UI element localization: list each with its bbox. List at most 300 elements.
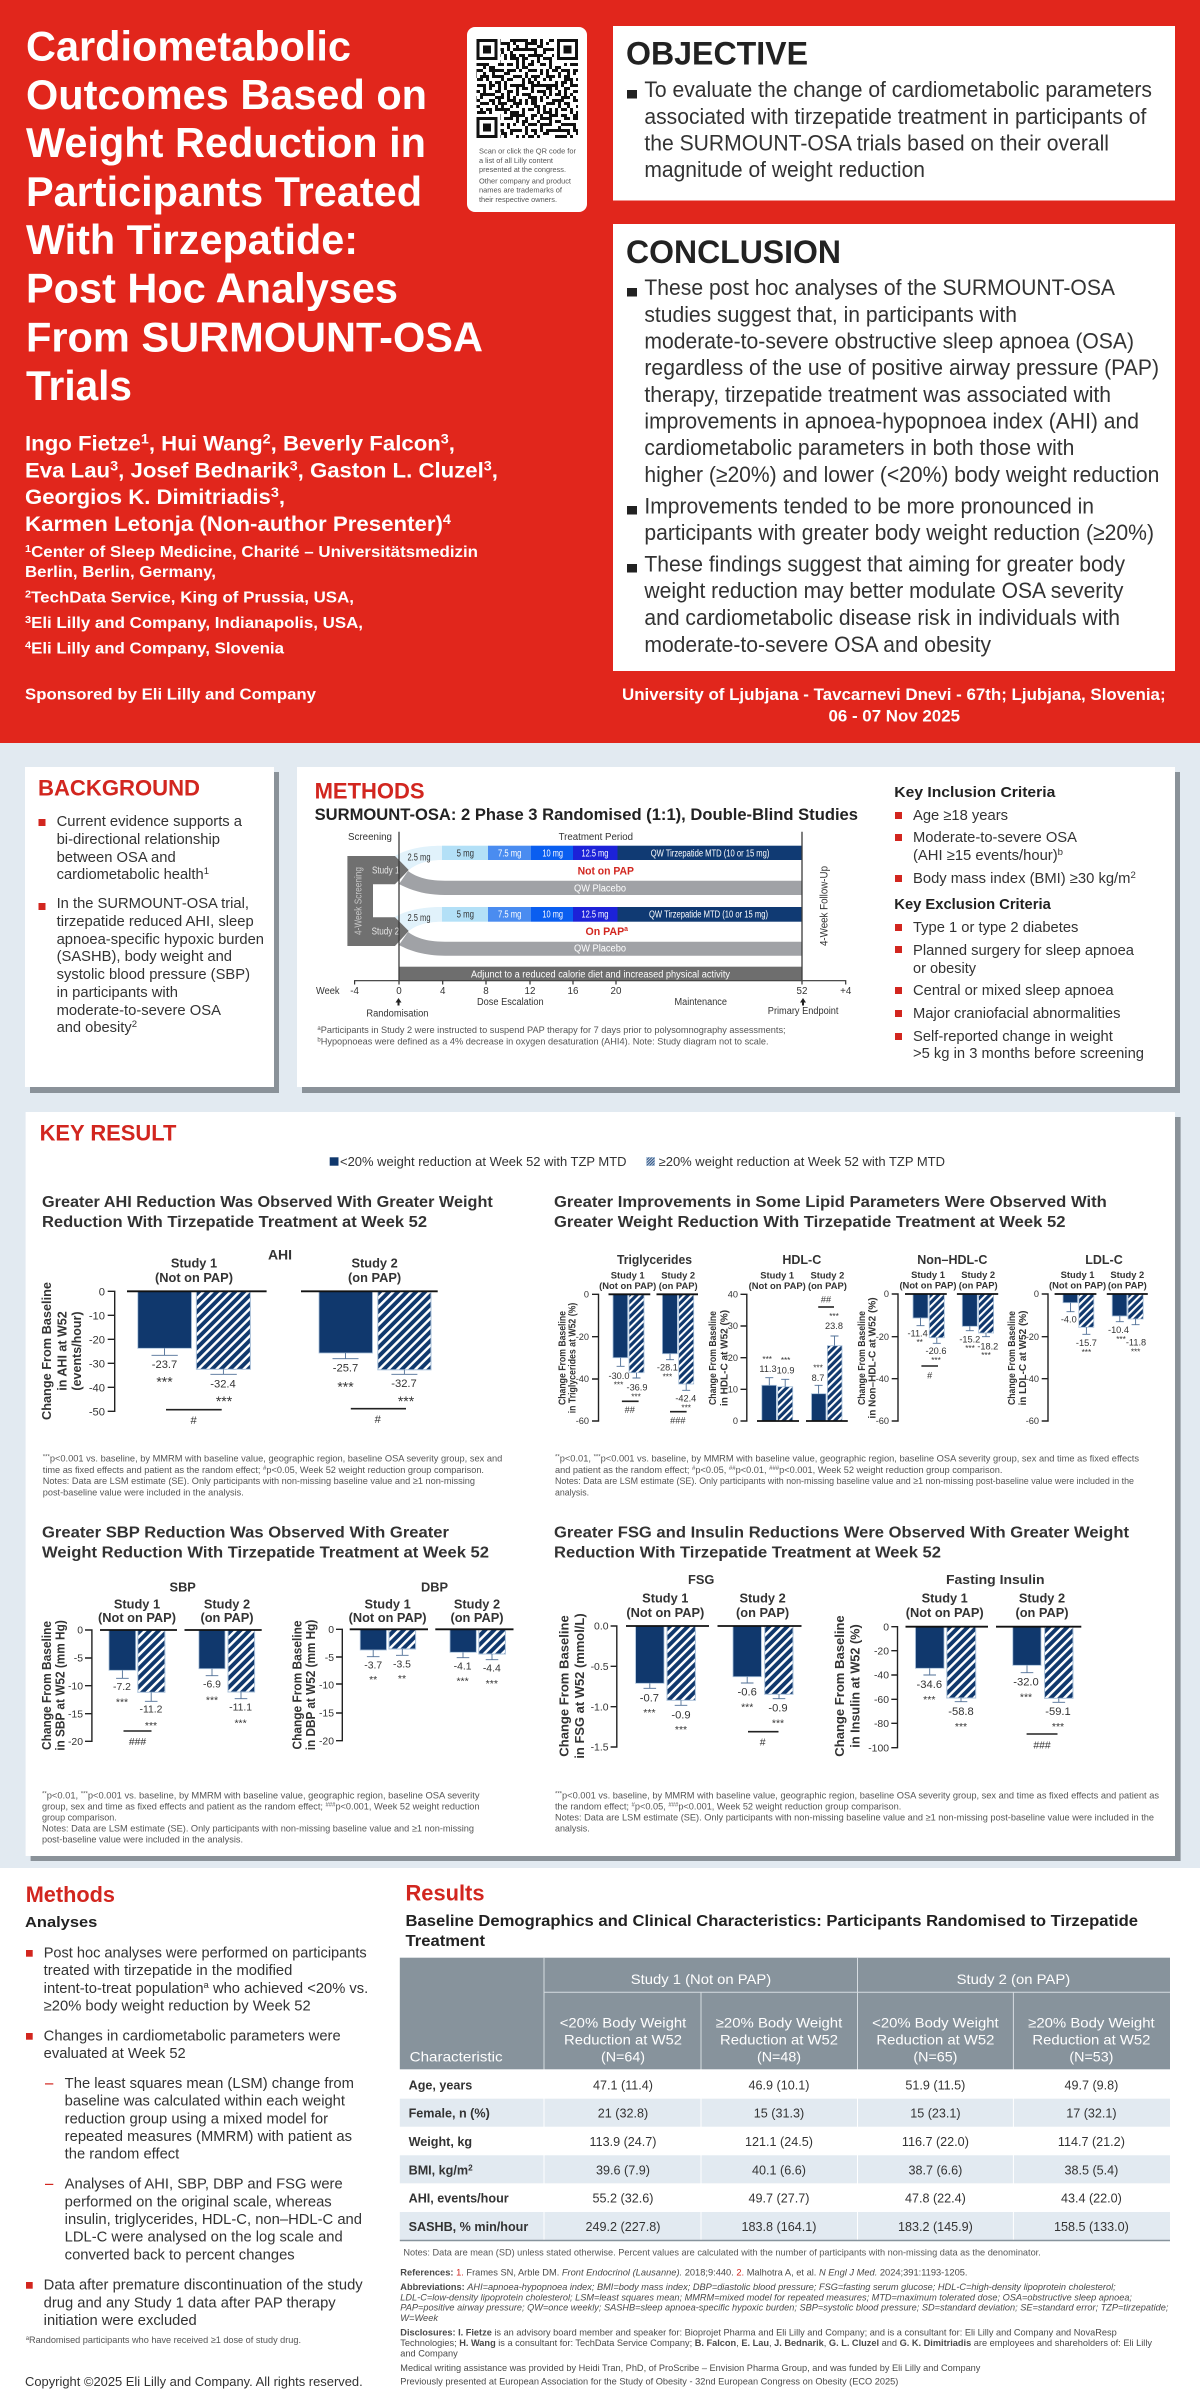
references and disclosures: Previously presented at European Association for the Study of Obesity - 32nd European Congress on Obesity (ECO 2025) [400, 2376, 898, 2387]
study 1 arm [395, 846, 802, 895]
values: ### [129, 1737, 146, 1748]
references and disclosures: and Company [400, 2348, 458, 2359]
values [907, 1329, 998, 1380]
chart heading: lipids: Greater Weight Reduction With Tirzepatide Treatment at Week 52 [554, 1214, 1066, 1231]
bar chart: DBP [290, 1580, 514, 1750]
chart heading: AHI: Greater AHI Reduction Was Observed With Greater Weight [42, 1194, 493, 1211]
footnote: AHI: ***p<0.001 vs. baseline, by MMRM with baseline value, geographic region, baseline OSA severity group, sex and [43, 1453, 502, 1464]
bar chart: AHI: AHI [268, 1246, 292, 1262]
y axis: in Non–HDL-C at W52 (%) [868, 1297, 878, 1419]
affiliations: 3Eli Lilly and Company, Indianapolis, USA, [25, 614, 363, 632]
values: # [375, 1414, 382, 1426]
y axis: -5 [74, 1654, 83, 1665]
footnote: lipids [555, 1453, 1139, 1497]
panel: methods analyses: Analyses [25, 1914, 97, 1931]
screening block: Study 1 [372, 866, 400, 876]
y axis: -20 [576, 1332, 589, 1342]
bar chart: non-HDL-C: Study 2 [961, 1269, 995, 1280]
week axis: +4 [840, 986, 852, 997]
values: *** [1082, 1348, 1092, 1357]
values: # [927, 1370, 933, 1380]
conference line: University of Ljubjana - Tavcarnevi Dnevi - 67th; Ljubjana, Slovenia; [622, 686, 1166, 704]
panel: background: moderate-to-severe OSA [57, 1003, 221, 1019]
inclusion and exclusion criteria: or obesity [913, 961, 977, 977]
table header: (N=64) [601, 2048, 645, 2064]
table header: Study 2 (on PAP) [957, 1971, 1070, 1987]
bar chart: SBP: Study 1 [114, 1596, 160, 1611]
conference line: 06 - 07 Nov 2025 [828, 708, 960, 726]
panel: background: apnoea-specific hypoxic burden [57, 932, 264, 948]
bar chart: fasting insulin: (on PAP) [1015, 1605, 1069, 1620]
panel: methods analyses [25, 1882, 368, 2345]
values [640, 1687, 788, 1748]
y axis: -10 [319, 1680, 334, 1692]
table header: Reduction at W52 [720, 2032, 838, 2048]
bar chart: non-HDL-C: Non–HDL-C [917, 1253, 987, 1267]
bar chart: triglycerides: Study 2 [661, 1270, 695, 1280]
values: *** [156, 1374, 173, 1390]
footnote: blood pressure: group comparison. [42, 1811, 117, 1822]
chart heading: AHI [42, 1194, 493, 1231]
copyright: Copyright ©2025 Eli Lilly and Company. All rights reserved. [25, 2374, 363, 2389]
bar chart: triglycerides: Study 1 [611, 1270, 645, 1280]
references and disclosures: PAP=positive airway pressure; QW=once weekly; SASHB=sleep apnoea-specific hypoxic burden; SBP=systolic blood pressure; SD=standard deviation; SE=standard error; TZP=tirzepatide; [400, 2302, 1169, 2313]
bar chart: triglycerides: Triglycerides [617, 1253, 692, 1267]
bar chart: fasting insulin: Study 2 [1019, 1590, 1065, 1606]
bar chart: HDL-C: HDL-C [782, 1253, 821, 1267]
table rows: 158.5 (133.0) [1054, 2220, 1129, 2234]
values: ## [625, 1405, 636, 1415]
bar chart: HDL-C: (on PAP) [808, 1280, 847, 1291]
bar chart: HDL-C: (Not on PAP) [749, 1280, 806, 1291]
table rows: Weight, kg [409, 2135, 472, 2149]
y axis: -40 [874, 1671, 889, 1682]
values: -25.7 [333, 1362, 358, 1374]
y axis: in LDL-C at W52 (%) [1018, 1310, 1029, 1406]
bar chart: HDL-C [708, 1253, 848, 1426]
footnote: glucose and insulin: ***p<0.001 vs. baseline, by MMRM with baseline value, geographic region, baseline OSA severity group, sex and time as fixed effects and patient as [555, 1789, 1159, 1800]
panel: background: between OSA and [57, 850, 176, 866]
title: Post Hoc Analyses [26, 264, 398, 312]
table rows: AHI, events/hour [409, 2192, 509, 2206]
bar chart: fasting insulin: (Not on PAP) [906, 1605, 984, 1620]
bar chart: FSG: (on PAP) [736, 1605, 789, 1620]
values [152, 1359, 417, 1427]
bulleted analyses text: Analyses of AHI, SBP, DBP and FSG were [65, 2176, 343, 2192]
table header: Reduction at W52 [1032, 2032, 1151, 2048]
bulleted analyses text: reduction group using a mixed model for [65, 2111, 328, 2127]
bulleted analyses text: treated with tirzepatide in the modified [44, 1963, 292, 1979]
values: -0.7 [640, 1692, 659, 1704]
values: -3.7 [364, 1661, 382, 1672]
chart heading: glucose and insulin: Greater FSG and Insulin Reductions Were Observed With Greater Weight [554, 1524, 1130, 1541]
chart heading: lipids [554, 1194, 1107, 1231]
panel: background: (SASHB), body weight and [57, 949, 232, 965]
diagram footnotes [317, 1024, 786, 1046]
values: -30.0 [609, 1371, 629, 1381]
table rows [400, 2069, 1170, 2240]
values: -32.0 [1013, 1676, 1039, 1688]
panel: conclusion: moderate-to-severe OSA and obesity [644, 632, 991, 657]
bar chart: non-HDL-C: Study 1 [911, 1269, 945, 1280]
affiliations: 2TechData Service, King of Prussia, USA, [25, 589, 354, 606]
panel: objective: the SURMOUNT-OSA trials based on their overall [644, 130, 1109, 156]
values: *** [762, 1355, 773, 1364]
values: ### [1033, 1740, 1051, 1751]
y axis: in DBP at W52 (mm Hg) [304, 1620, 318, 1750]
table rows: BMI, kg/m2 [409, 2163, 473, 2178]
values: *** [614, 1380, 624, 1390]
panel: conclusion: Improvements tended to be more pronounced in [644, 493, 1094, 518]
table header: Reduction at W52 [564, 2032, 682, 2048]
values: *** [486, 1678, 498, 1690]
references and disclosures [400, 2266, 1169, 2387]
panel: conclusion: cardiometabolic parameters in both those with [644, 435, 1074, 460]
y axis [833, 1615, 898, 1757]
bars [905, 1294, 998, 1343]
table rows: 47.1 (11.4) [593, 2078, 653, 2092]
y axis: -40 [1026, 1374, 1039, 1384]
footnote: blood pressure: post-baseline value were included in the analysis. [42, 1834, 243, 1845]
values: *** [663, 1372, 673, 1382]
values: *** [772, 1718, 784, 1730]
week axis [316, 981, 852, 1008]
bulleted analyses text [26, 1945, 368, 2329]
bars [127, 1291, 438, 1374]
table rows: 114.7 (21.2) [1058, 2135, 1125, 2149]
table rows: 55.2 (32.6) [593, 2192, 653, 2206]
table rows: 43.4 (22.0) [1061, 2192, 1122, 2206]
values: *** [116, 1696, 128, 1708]
values: *** [741, 1702, 753, 1714]
table header: Reduction at W52 [876, 2032, 995, 2048]
chart heading: blood pressure: Greater SBP Reduction Was Observed With Greater [42, 1524, 449, 1541]
table header: <20% Body Weight [560, 2014, 686, 2030]
bulleted analyses text: intent-to-treat populationa who achieved <20% vs. [44, 1979, 368, 1997]
study 2 arm [395, 907, 802, 956]
inclusion and exclusion criteria: Major craniofacial abnormalities [913, 1006, 1120, 1022]
bar chart: DBP: (on PAP) [450, 1610, 504, 1625]
bar chart: triglycerides: (on PAP) [659, 1280, 698, 1291]
table rows: 46.9 (10.1) [749, 2078, 809, 2092]
panel: background: in participants with [57, 985, 178, 1001]
panel: methods [297, 767, 1180, 1093]
bar chart: AHI: (on PAP) [348, 1270, 401, 1285]
footnote: AHI: Notes: Data are LSM estimate (SE). Only participants with non-missing baseline value and ≥1 non-missing [43, 1475, 475, 1486]
study 2 arm: 10 mg [542, 910, 563, 920]
bar chart: fasting insulin [833, 1572, 1081, 1757]
table rows: 17 (32.1) [1066, 2106, 1117, 2120]
bar chart: non-HDL-C: (on PAP) [959, 1280, 998, 1291]
QR caption: Scan or click the QR code for [479, 146, 577, 156]
table rows: 40.1 (6.6) [752, 2164, 806, 2178]
bar chart: FSG: FSG [688, 1572, 714, 1587]
table rows: 49.7 (9.8) [1064, 2078, 1118, 2092]
references and disclosures: Medical writing assistance was provided by Heidi Tran, PhD, of ProScribe – Envision Pharma Group, and was funded by Eli Lilly and Company [400, 2362, 981, 2373]
values: *** [981, 1351, 992, 1360]
table notes: Notes: Data are mean (SD) unless stated otherwise. Percent values are calculated with the number of participants with non-missing data as the denominator. [403, 2246, 1041, 2257]
y axis: (events/hour) [70, 1311, 84, 1391]
values: -32.4 [210, 1378, 236, 1390]
title: From SURMOUNT-OSA [26, 314, 483, 360]
panel: background: tirzepatide reduced AHI, sleep [57, 914, 254, 930]
y axis: in AHI at W52 [56, 1311, 70, 1391]
bar chart: LDL-C: Study 1 [1061, 1269, 1095, 1280]
inclusion and exclusion criteria: Planned surgery for sleep apnoea [913, 943, 1135, 959]
values: *** [337, 1379, 354, 1395]
values: -15.7 [1076, 1338, 1097, 1348]
screening block: 4-Week Screening [354, 867, 364, 935]
values: -7.2 [113, 1682, 131, 1693]
bar chart: SBP: (Not on PAP) [98, 1610, 176, 1625]
values: ## [821, 1294, 832, 1304]
panel: conclusion: and cardiometabolic disease risk in individuals with [644, 605, 1120, 630]
study 1 arm: QW Placebo [574, 884, 627, 894]
study 1 arm: 7.5 mg [498, 848, 521, 859]
bulleted analyses text: Data after premature discontinuation of the study [44, 2278, 363, 2294]
legend: <20% weight reduction at Week 52 with TZP MTD [340, 1155, 626, 1169]
table rows: 116.7 (22.0) [902, 2135, 969, 2149]
y axis [708, 1290, 747, 1426]
footnote: blood pressure: Notes: Data are LSM estimate (SE). Only participants with non-missing baseline value and ≥1 non-missing [42, 1823, 474, 1834]
table header: <20% Body Weight [872, 2014, 999, 2030]
chart heading: glucose and insulin: Reduction With Tirzepatide Treatment at Week 52 [554, 1544, 941, 1561]
panel: conclusion: CONCLUSION [626, 234, 841, 270]
table rows: 15 (23.1) [910, 2106, 961, 2120]
bar chart: LDL-C: Study 2 [1110, 1269, 1144, 1280]
table rows: 39.6 (7.9) [596, 2164, 650, 2178]
bar chart: fasting insulin: Fasting Insulin [946, 1572, 1045, 1587]
values: *** [1116, 1335, 1127, 1344]
table header: (N=53) [1069, 2048, 1113, 2064]
y axis: -5 [325, 1653, 334, 1664]
table header: ≥20% Body Weight [1028, 2014, 1155, 2030]
values: -20.6 [926, 1346, 946, 1356]
values [113, 1680, 252, 1748]
y axis: Change From Baseline [833, 1615, 847, 1757]
y axis [1007, 1289, 1048, 1426]
week axis: -4 [350, 986, 360, 997]
authors: Eva Lau 3, Josef Bednarik 3, Gaston L. Cluzel 3, [25, 458, 498, 482]
values: *** [1131, 1348, 1141, 1356]
legend: ≥20% weight reduction at Week 52 with TZP MTD [659, 1155, 945, 1169]
footnote: lipids: and patient as the random effect; #p<0.05, ##p<0.01, ###p<0.001, Week 52 weight reduction group comparison. [555, 1464, 1002, 1475]
table header: Study 1 (Not on PAP) [631, 1971, 771, 1987]
footnote: lipids: Notes: Data are LSM estimate (SE). Only participants with non-missing baseline value and ≥1 non-missing post-baseline value were included in the [555, 1475, 1134, 1486]
values: -0.9 [671, 1709, 691, 1721]
values [609, 1362, 696, 1425]
bars [757, 1336, 848, 1421]
references and disclosures: Disclosures: I. Fietze is an advisory board member and speaker for: Bioprojet Pharma and Eli Lilly and Company; and is a consultant for: Eli Lilly and Company and NovaResp [400, 2327, 1117, 2338]
sponsor line: Sponsored by Eli Lilly and Company [25, 686, 316, 704]
table header: (N=65) [913, 2048, 957, 2064]
inclusion and exclusion criteria: Key Exclusion Criteria [894, 896, 1051, 913]
y axis: -1.5 [591, 1743, 609, 1754]
values: -23.7 [152, 1359, 177, 1371]
bar chart: non-HDL-C: (Not on PAP) [899, 1280, 957, 1291]
y axis: 0 [733, 1416, 738, 1426]
authors: Georgios K. Dimitriadis 3, [25, 484, 285, 509]
values: -15.2 [959, 1334, 980, 1344]
panel: background [25, 767, 279, 1093]
arrow: primary endpoint [768, 998, 839, 1017]
footnote: glucose and insulin: the random effect; #p<0.05, ###p<0.001, Week 52 weight reduction group comparison. [555, 1800, 901, 1811]
y axis: Change From Baseline [558, 1615, 572, 1757]
study 1 arm: Not on PAP [578, 866, 634, 878]
values: *** [398, 1393, 415, 1409]
y axis: -20 [89, 1334, 105, 1346]
y axis: -20 [874, 1646, 889, 1657]
week axis: 20 [611, 986, 622, 997]
bar chart: HDL-C: Study 1 [760, 1270, 794, 1280]
values: -6.9 [203, 1680, 221, 1691]
y axis [857, 1289, 898, 1426]
study 2 arm: 2.5 mg [408, 913, 430, 924]
study 1 arm: 10 mg [542, 848, 563, 859]
affiliations [25, 544, 478, 658]
values [759, 1294, 843, 1383]
study 2 arm: QW Tirzepatide MTD (10 or 15 mg) [649, 910, 768, 920]
y axis: 40 [728, 1290, 738, 1300]
study 2 arm: QW Placebo [574, 944, 627, 954]
footnote: blood pressure: group, sex and time as fixed effects and patient as the random effect; ###p<0.001, Week 52 weight reduction [42, 1800, 480, 1811]
bars [626, 1626, 802, 1705]
values: *** [781, 1356, 791, 1365]
panel: key result: KEY RESULT [40, 1121, 177, 1146]
follow-up label: 4-Week Follow-Up [818, 866, 830, 946]
bulleted analyses text: the random effect [65, 2147, 179, 2163]
bulleted analyses text: LDL-C were analysed on the log scale and [65, 2230, 343, 2246]
bulleted analyses text: performed on the original scale, whereas [65, 2194, 332, 2210]
y axis [557, 1290, 598, 1426]
footnote: AHI: post-baseline value were included in the analysis. [43, 1486, 244, 1497]
references and disclosures: References: 1. Frames SN, Arble DM. Front Endocrinol (Lausanne). 2018;9:440. 2. Malhotra A, et al. N Engl J Med. 2024;391:1193-1205. [400, 2266, 967, 2277]
y axis: 30 [728, 1321, 738, 1331]
week axis: 52 [797, 986, 807, 997]
study design diagram [316, 832, 852, 1020]
y axis: in SBP at W52 (mm Hg) [54, 1620, 68, 1751]
footnote: AHI [43, 1453, 502, 1497]
values: -4.1 [454, 1662, 472, 1673]
y axis: 0 [883, 1622, 889, 1633]
bars [608, 1294, 698, 1390]
study 2 arm: 7.5 mg [498, 910, 521, 920]
QR caption: presented at the congress. [479, 165, 566, 174]
legend [330, 1155, 945, 1169]
QR card [467, 27, 587, 212]
y axis: Change From Baseline [40, 1621, 54, 1750]
y axis: in HDL-C at W52 (%) [719, 1310, 730, 1406]
bar chart: DBP: Study 2 [454, 1596, 500, 1611]
panel: background: In the SURMOUNT-OSA trial, [57, 896, 249, 912]
inclusion and exclusion criteria: Central or mixed sleep apnoea [913, 983, 1114, 999]
values: -58.8 [948, 1706, 974, 1718]
methods footnote: aRandomised participants who have received ≥1 dose of study drug. [26, 2334, 301, 2345]
values: -4.0 [1061, 1315, 1077, 1325]
study 2 arm: 5 mg [457, 910, 474, 920]
diagram footnotes: aParticipants in Study 2 were instructed to suspend PAP therapy for 7 days prior to polysomnography assessments; [317, 1024, 786, 1035]
bar chart: AHI: Study 1 [171, 1256, 217, 1270]
panel: background: bi-directional relationship [57, 832, 220, 848]
y axis: 0.0 [594, 1622, 609, 1633]
table: baseline characteristics [400, 1958, 1170, 2240]
values: *** [643, 1707, 656, 1719]
bulleted analyses text: ≥20% body weight reduction by Week 52 [44, 1998, 311, 2014]
values: 8.7 [812, 1373, 824, 1383]
inclusion and exclusion criteria: Age ≥18 years [913, 808, 1008, 824]
table rows: 249.2 (227.8) [586, 2220, 660, 2234]
values: *** [681, 1404, 692, 1412]
y axis: in Insulin at W52 (%) [848, 1624, 862, 1748]
title: With Tirzepatide: [26, 216, 358, 263]
y axis [290, 1620, 342, 1750]
week axis: 8 [483, 986, 489, 997]
bar chart: DBP: Study 1 [364, 1596, 411, 1611]
values: -11.2 [140, 1705, 163, 1716]
values [917, 1676, 1071, 1751]
table rows: 121.1 (24.5) [745, 2135, 813, 2149]
panel: background: Current evidence supports a [57, 814, 243, 830]
table rows: Female, n (%) [409, 2106, 490, 2120]
y axis [558, 1613, 617, 1759]
footnote: lipids: **p<0.01, ***p<0.001 vs. baseline, by MMRM with baseline value, geographic region, baseline OSA severity group, sex and time as fixed effects [555, 1453, 1139, 1464]
bar chart: DBP: DBP [421, 1580, 448, 1594]
table rows: 38.7 (6.6) [908, 2164, 962, 2178]
bar chart: FSG: (Not on PAP) [626, 1605, 704, 1620]
bulleted analyses text: initiation were excluded [44, 2313, 197, 2329]
values: -36.9 [627, 1382, 647, 1392]
values [1061, 1315, 1146, 1357]
y axis: -10 [89, 1310, 105, 1322]
y axis: -50 [89, 1406, 105, 1418]
bar chart: non-HDL-C [857, 1253, 998, 1426]
bulleted analyses text: insulin, triglycerides, HDL-C, non–HDL-C and [65, 2212, 362, 2228]
y axis [40, 1282, 115, 1420]
study 1 arm: 12.5 mg [582, 848, 608, 859]
affiliations: 4Eli Lilly and Company, Slovenia [25, 640, 284, 658]
y axis: 0 [1034, 1289, 1039, 1299]
panel: conclusion: weight reduction may better modulate OSA severity [643, 578, 1123, 603]
panel: methods: SURMOUNT-OSA: 2 Phase 3 Randomised (1:1), Double-Blind Studies [315, 805, 858, 824]
bar chart: SBP: (on PAP) [200, 1610, 254, 1625]
values: -28.1 [657, 1362, 678, 1372]
bar chart: AHI [40, 1246, 438, 1427]
values: -42.4 [675, 1393, 696, 1403]
footnote: lipids: analysis. [555, 1486, 589, 1497]
week axis: 16 [568, 986, 579, 997]
header band [0, 0, 1200, 743]
references and disclosures: Abbreviations: AHI=apnoea-hypopnoea index; BMI=body mass index; DBP=diastolic blood pressure; FSG=fasting serum glucose; HDL-C=high-density lipoprotein cholesterol; [400, 2281, 1116, 2292]
QR caption: a list of all Lilly content [479, 156, 553, 165]
bulleted analyses text: The least squares mean (LSM) change from [65, 2076, 354, 2092]
values: *** [1020, 1692, 1032, 1704]
authors: Karmen Letonja (Non-author Presenter) 4 [25, 512, 451, 536]
footnote: blood pressure: **p<0.01, ***p<0.001 vs. baseline, by MMRM with baseline value, geographic region, baseline OSA severity [42, 1789, 480, 1800]
bars [1055, 1294, 1148, 1334]
y axis: -20 [68, 1737, 83, 1748]
affiliations: 1Center of Sleep Medicine, Charité – Universitätsmedizin [25, 544, 478, 561]
bar chart: LDL-C [1007, 1253, 1148, 1426]
values: 10.9 [777, 1365, 795, 1375]
y axis: -40 [89, 1382, 105, 1394]
authors: Ingo Fietze 1, Hui Wang 2, Beverly Falcon 3, [25, 431, 455, 456]
table header [400, 1958, 1170, 2069]
screening block [347, 856, 409, 946]
y axis: in Triglycerides at W52 (%) [568, 1303, 579, 1413]
references and disclosures: LDL-C=low-density lipoprotein cholesterol; LSM=least squares mean; MMRM=mixed model for repeated measures; MTD=maximum tolerated dose; OSA=obstructive sleep apnoea; [400, 2291, 1132, 2302]
y axis: -20 [319, 1736, 334, 1747]
y axis: -15 [68, 1709, 83, 1720]
